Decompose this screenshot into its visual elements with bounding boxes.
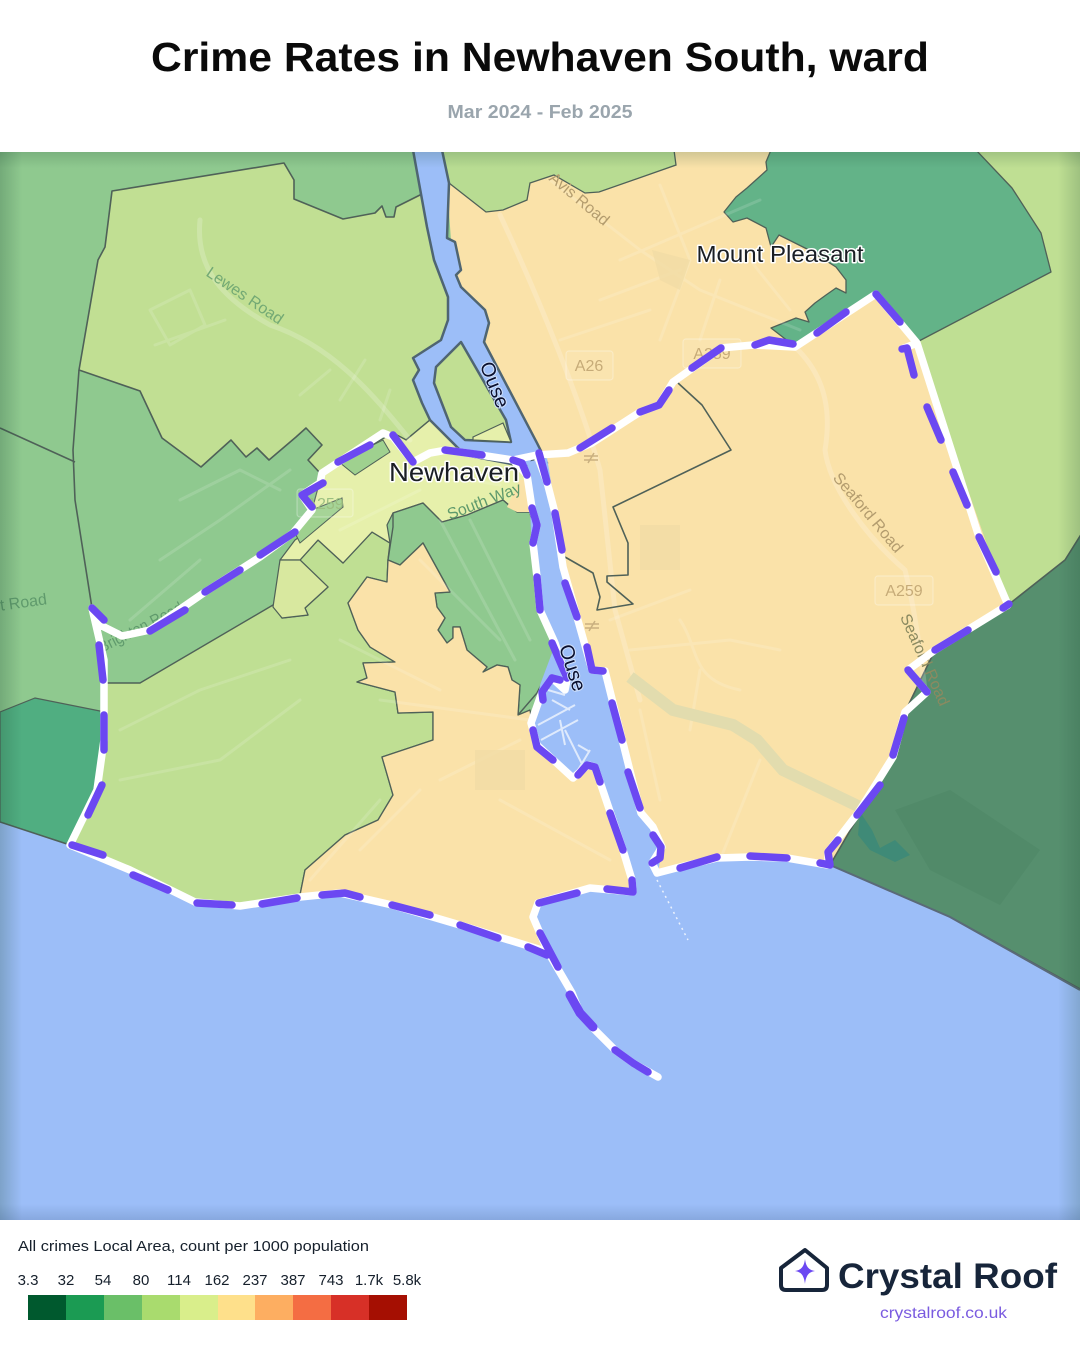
ward: east light green: [920, 152, 1080, 601]
ward: south way medium green: [388, 500, 555, 715]
icon: house with star: [781, 1250, 827, 1290]
road shield: A259 north: [683, 339, 741, 368]
legend tick labels: 32: [58, 1272, 74, 1289]
website url: crystalroof.co.uk: [880, 1305, 1008, 1322]
road label: west road: t Road: [0, 591, 48, 615]
road label: Brighton Road: Brighton Road: [96, 599, 186, 657]
river label: Ouse north: Ouse: [475, 359, 513, 411]
legend tick labels: 1.7k: [355, 1272, 384, 1289]
map panel: [0, 150, 1080, 1220]
map edge vignette: [0, 152, 1080, 1220]
legend colour scale: [28, 1295, 407, 1320]
river label: Ouse south: Ouse: [554, 642, 590, 694]
legend tick labels: 3.3: [18, 1272, 38, 1289]
ward: small green slivers: [295, 440, 390, 543]
ward: north light green: [442, 150, 676, 212]
ward: north west light green: [79, 163, 448, 473]
road label: Seaford Road upper: Seaford Road: [829, 470, 906, 556]
road shield: A259 west: [297, 489, 353, 517]
ward: east cream: [445, 152, 1008, 874]
logo: Crystal Roof: [781, 1250, 1057, 1322]
road shield: A259 east: A259: [885, 583, 923, 600]
ward: south west light green: [70, 532, 433, 905]
lower river and marina: [527, 458, 662, 892]
legend tick labels: 162: [204, 1272, 230, 1289]
river island: [434, 342, 511, 442]
place label: Mount Pleasant: Mount Pleasant: [696, 241, 864, 267]
date range subtitle: Mar 2024 - Feb 2025: [448, 102, 632, 122]
legend tick labels: 54: [95, 1272, 111, 1289]
legend tick labels: 743: [318, 1272, 344, 1289]
legend tick labels: [18, 1272, 422, 1289]
base layer: medium crime wards: [0, 152, 988, 714]
grey canal strip: [630, 677, 860, 807]
legend tick labels: 387: [280, 1272, 306, 1289]
legend: [18, 1238, 422, 1320]
place label: Newhaven: Newhaven: [389, 457, 519, 487]
built-up patches: [475, 250, 690, 790]
road shield: A259 west: A259: [306, 496, 344, 513]
ward: pale west block: [273, 560, 328, 618]
road shield: A26: A26: [575, 358, 603, 375]
marina jetties: [538, 690, 590, 770]
ward: newhaven centre pale: [280, 420, 537, 563]
road shield: A26: [566, 351, 613, 380]
legend tick labels: 5.8k: [393, 1272, 422, 1289]
legend tick labels: 80: [133, 1272, 149, 1289]
logo wordmark: Crystal Roof: [838, 1257, 1057, 1296]
road label: Avis Road: Avis Road: [546, 170, 612, 229]
island pale tip: [473, 423, 511, 442]
sea: [0, 822, 1080, 1220]
road label: South Way: South Way: [445, 480, 524, 524]
legend tick labels: 237: [242, 1272, 268, 1289]
small cream patch by river: [507, 480, 530, 512]
railway station icons: [584, 453, 599, 631]
pond: [858, 812, 910, 862]
road label: Lewes Road: Lewes Road: [203, 264, 286, 328]
harbour pier dotted line: [657, 880, 688, 940]
darker woodland patch: [895, 790, 1040, 905]
legend tick labels: 114: [167, 1272, 191, 1289]
west ward boundary lines: [0, 370, 92, 608]
dark coast edge: [830, 865, 1080, 990]
ward: north east dark green: [724, 150, 1051, 345]
river ouse: [413, 150, 547, 467]
ward boundary white outline: [70, 294, 1008, 1077]
road label: Seaford Road lower: Seaford Road: [896, 612, 952, 709]
ward: south central cream: [300, 543, 640, 952]
title: Crime Rates in Newhaven South, ward: [151, 34, 929, 80]
ward: south east dark green: [830, 533, 1080, 990]
road network: [120, 180, 925, 880]
road shield: A259 east: [875, 576, 933, 605]
ward: south west teal: [0, 698, 105, 845]
other ward boundary lines: [565, 383, 731, 610]
ward boundary purple dashes: [72, 294, 1009, 1072]
road shield: A259 north: A259: [693, 346, 731, 363]
legend title: All crimes Local Area, count per 1000 population: [18, 1238, 369, 1255]
